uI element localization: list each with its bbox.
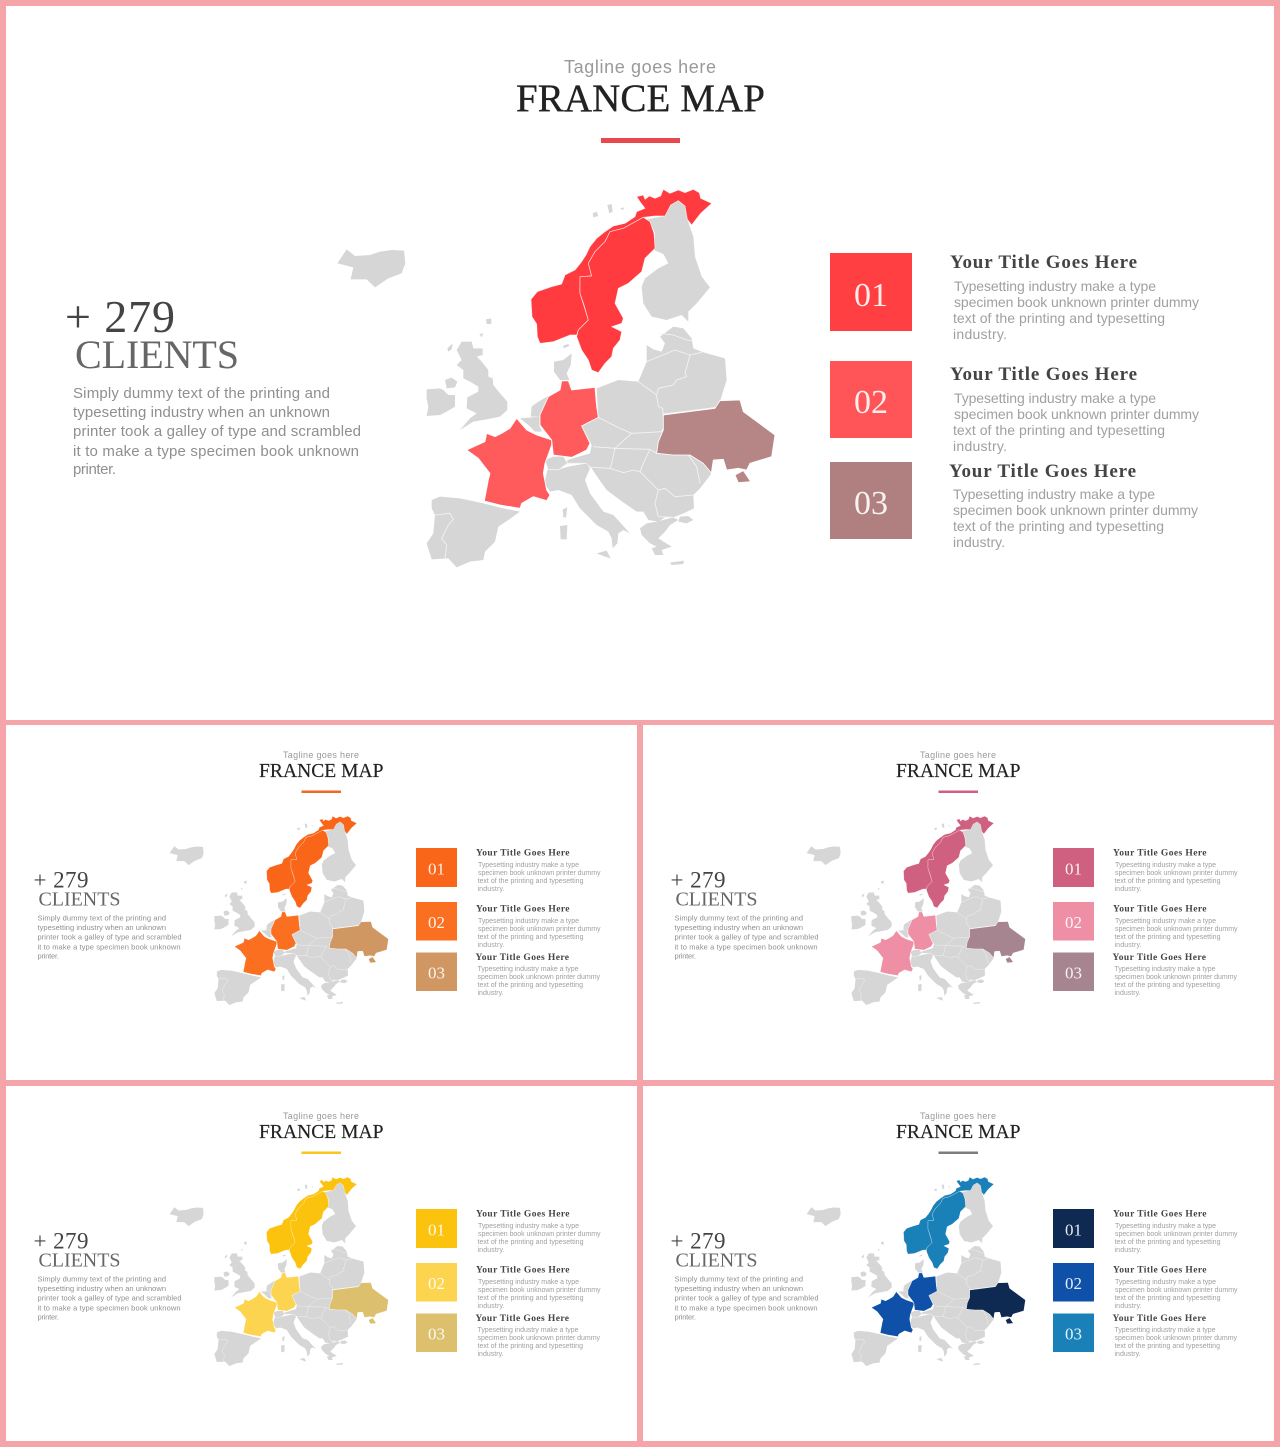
item 02 text: Your Title Goes Here	[950, 364, 1137, 385]
item 01 text: industry.	[1114, 886, 1142, 893]
item 01 box: 01	[1065, 860, 1082, 878]
item 03 text: specimen book unknown printer dummy	[478, 974, 600, 981]
item 02 text: text of the printing and typesetting	[953, 422, 1165, 438]
item 03 text	[476, 953, 600, 997]
left description: typesetting industry when an unknown	[674, 923, 803, 932]
item 01 box	[1053, 848, 1094, 887]
item 01 text: specimen book unknown printer dummy	[478, 870, 601, 877]
left description: printer took a galley of type and scrambled	[674, 932, 818, 942]
title underline	[302, 790, 341, 793]
item 02 text: specimen book unknown printer dummy	[954, 406, 1199, 422]
item 02 text: text of the printing and typesetting	[1114, 934, 1221, 941]
item 01 box	[416, 1209, 457, 1248]
item 02 box: 02	[428, 913, 445, 932]
stat: clients label: CLIENTS	[676, 888, 758, 910]
item 03 box	[416, 952, 457, 991]
left description: it to make a type specimen book unknown	[73, 443, 359, 460]
item 03 text	[476, 1314, 600, 1358]
item 01 text: text of the printing and typesetting	[478, 878, 584, 885]
item 03 text: text of the printing and typesetting	[478, 1343, 583, 1350]
item 02 text: specimen book unknown printer dummy	[1115, 1287, 1238, 1294]
item 03 text: Your Title Goes Here	[949, 461, 1136, 482]
item 03 text: Typesetting industry make a type	[1114, 1327, 1216, 1334]
item 02 text	[476, 1266, 601, 1310]
item 02 text: Your Title Goes Here	[1113, 1266, 1206, 1276]
item 01 text: text of the printing and typesetting	[478, 1239, 584, 1246]
item 02 box: 02	[428, 1274, 445, 1293]
item 02 text	[476, 904, 601, 949]
item 01 text	[950, 252, 1199, 342]
item 03 text: Typesetting industry make a type	[953, 486, 1155, 502]
item 02 text: Typesetting industry make a type	[1115, 918, 1216, 925]
item 01 text: Typesetting industry make a type	[1115, 1223, 1216, 1230]
item 02 text: Typesetting industry make a type	[478, 918, 579, 925]
item 03 box	[416, 1314, 457, 1352]
tagline: Tagline goes here	[283, 750, 359, 760]
tagline: Tagline goes here	[920, 750, 996, 760]
stat: clients label: CLIENTS	[38, 1250, 120, 1272]
item 03 box	[1053, 1314, 1094, 1352]
item 02 text: Typesetting industry make a type	[954, 390, 1156, 406]
left description: Simply dummy text of the printing and	[73, 385, 330, 402]
item 01 text: Your Title Goes Here	[950, 252, 1137, 273]
item 02 box	[416, 902, 457, 940]
title underline	[302, 1152, 341, 1154]
item 03 text: text of the printing and typesetting	[1114, 982, 1220, 989]
item 01 text: Typesetting industry make a type	[478, 862, 579, 869]
left description: it to make a type specimen book unknown	[38, 942, 180, 952]
item 03 text: Your Title Goes Here	[476, 953, 569, 963]
title underline	[938, 1152, 978, 1154]
item 01 box: 01	[1065, 1220, 1082, 1240]
stat: clients number: + 279	[670, 868, 726, 892]
item 01 text: Typesetting industry make a type	[478, 1223, 579, 1230]
item 03 box	[1053, 952, 1094, 991]
item 02 text: text of the printing and typesetting	[478, 1295, 584, 1302]
item 03 box: 03	[854, 485, 888, 522]
left description: printer took a galley of type and scrambled	[38, 932, 182, 942]
item 02 text: industry.	[478, 1303, 505, 1310]
item 03 text: industry.	[478, 1351, 504, 1358]
left description: printer took a galley of type and scrambled	[73, 423, 361, 440]
item 02 text: industry.	[478, 942, 505, 949]
item 02 text: Your Title Goes Here	[476, 1266, 570, 1276]
item 02 text	[950, 364, 1199, 454]
stat: clients number: + 279	[65, 291, 175, 342]
panel: pink slide background	[643, 725, 1274, 1080]
item 01 text	[1113, 1210, 1238, 1254]
item 02 box: 02	[854, 384, 888, 421]
slide: pink	[670, 750, 1238, 1005]
item 01 text	[476, 848, 601, 893]
title: FRANCE MAP	[896, 761, 1021, 782]
item 01 box	[416, 848, 457, 887]
item 03 text: industry.	[478, 990, 504, 997]
item 03 text: Your Title Goes Here	[1112, 1314, 1206, 1324]
item 02 text: specimen book unknown printer dummy	[1115, 926, 1238, 933]
left description	[38, 914, 182, 960]
item 01 text: specimen book unknown printer dummy	[478, 1231, 601, 1238]
stat: clients label: CLIENTS	[38, 888, 120, 910]
item 02 text: Typesetting industry make a type	[478, 1279, 579, 1286]
item 02 box	[1053, 1263, 1094, 1302]
slide: orange	[34, 750, 601, 1005]
tagline: Tagline goes here	[920, 1111, 996, 1121]
panel: blue slide background	[643, 1086, 1274, 1441]
left description: it to make a type specimen book unknown	[674, 942, 818, 952]
item 03 box: 03	[1065, 964, 1082, 982]
item 03 text: specimen book unknown printer dummy	[1114, 974, 1238, 981]
map of Europe	[807, 816, 1025, 1005]
item 03 text: text of the printing and typesetting	[478, 982, 583, 989]
left description: typesetting industry when an unknown	[73, 404, 330, 421]
item 01 text: Your Title Goes Here	[1113, 1210, 1206, 1220]
item 03 text: Typesetting industry make a type	[478, 1327, 579, 1334]
left description: printer.	[38, 1312, 59, 1322]
item 02 text: specimen book unknown printer dummy	[478, 926, 601, 933]
left description: printer took a galley of type and scrambled	[38, 1294, 182, 1302]
stat: clients label: CLIENTS	[75, 332, 239, 377]
item 01 box	[1053, 1209, 1094, 1248]
item 02 box: 02	[1065, 913, 1082, 932]
item 01 text: Your Title Goes Here	[476, 848, 570, 858]
item 01 text: industry.	[1114, 1247, 1142, 1254]
item 01 box: 01	[428, 860, 445, 878]
item 02 text: industry.	[1114, 942, 1142, 949]
stat: clients number: + 279	[34, 1228, 88, 1254]
item 03 text: industry.	[1114, 990, 1141, 997]
item 03 text	[1112, 1314, 1238, 1358]
item 01 text	[476, 1210, 601, 1254]
item 03 text: specimen book unknown printer dummy	[953, 502, 1198, 518]
item 01 text: Typesetting industry make a type	[1115, 862, 1216, 869]
left description	[73, 385, 361, 478]
item 02 text: Typesetting industry make a type	[1115, 1279, 1216, 1286]
panel: yellow slide background	[6, 1086, 637, 1441]
panel: orange slide background	[6, 725, 637, 1080]
tagline: Tagline goes here	[564, 57, 716, 77]
item 01 box: 01	[428, 1220, 445, 1240]
item 02 text: Your Title Goes Here	[476, 904, 570, 914]
slide: blue	[670, 1111, 1238, 1366]
item 03 text: text of the printing and typesetting	[1114, 1343, 1220, 1350]
item 02 box	[830, 361, 912, 438]
item 01 text: industry.	[953, 326, 1007, 342]
left description: printer.	[674, 952, 696, 960]
left description: printer.	[73, 461, 116, 478]
left description: Simply dummy text of the printing and	[674, 1274, 803, 1284]
item 03 box: 03	[428, 1324, 445, 1344]
left description	[674, 914, 818, 960]
item 01 text: industry.	[478, 886, 505, 893]
item 02 text: industry.	[1114, 1303, 1142, 1310]
left description: it to make a type specimen book unknown	[674, 1304, 818, 1312]
item 03 text: specimen book unknown printer dummy	[478, 1335, 600, 1342]
stat: clients number: + 279	[670, 1228, 726, 1254]
item 02 box	[1053, 902, 1094, 940]
title: FRANCE MAP	[896, 1122, 1021, 1143]
left description	[674, 1274, 818, 1322]
item 01 text: Your Title Goes Here	[1113, 848, 1206, 858]
tagline: Tagline goes here	[283, 1111, 359, 1121]
item 02 text: text of the printing and typesetting	[478, 934, 584, 941]
item 03 box	[830, 462, 912, 539]
item 02 text	[1113, 904, 1238, 949]
item 02 text: text of the printing and typesetting	[1114, 1295, 1221, 1302]
title: FRANCE MAP	[516, 77, 765, 120]
item 01 text: text of the printing and typesetting	[1114, 1239, 1221, 1246]
item 03 text: industry.	[953, 534, 1005, 550]
map of Europe	[170, 1177, 388, 1366]
item 01 box: 01	[854, 277, 888, 314]
left description: Simply dummy text of the printing and	[674, 914, 803, 922]
item 01 text	[1113, 848, 1238, 893]
map of Europe	[807, 1177, 1025, 1366]
item 03 text: Your Title Goes Here	[476, 1314, 569, 1324]
item 01 text: specimen book unknown printer dummy	[1115, 870, 1238, 877]
item 03 box: 03	[428, 964, 445, 982]
item 02 text: industry.	[953, 438, 1007, 454]
left description: typesetting industry when an unknown	[38, 923, 166, 932]
left description: Simply dummy text of the printing and	[38, 1274, 166, 1284]
title underline	[601, 138, 680, 143]
item 01 text: industry.	[478, 1247, 505, 1254]
item 02 text: Your Title Goes Here	[1113, 904, 1206, 914]
title underline	[938, 790, 978, 793]
left description	[38, 1274, 182, 1322]
item 01 text: Typesetting industry make a type	[954, 278, 1156, 294]
item 03 text: specimen book unknown printer dummy	[1114, 1335, 1238, 1342]
left description: typesetting industry when an unknown	[674, 1284, 803, 1293]
slide: large red	[65, 57, 1199, 567]
left description: it to make a type specimen book unknown	[38, 1304, 180, 1312]
left description: typesetting industry when an unknown	[38, 1284, 166, 1293]
stat: clients number: + 279	[34, 868, 88, 892]
item 01 text: text of the printing and typesetting	[953, 310, 1165, 326]
item 02 box	[416, 1263, 457, 1302]
item 01 box	[830, 253, 912, 331]
left description: printer.	[38, 952, 59, 960]
left description: printer took a galley of type and scrambled	[674, 1294, 818, 1302]
item 01 text: text of the printing and typesetting	[1114, 878, 1221, 885]
item 03 text: Typesetting industry make a type	[478, 966, 579, 973]
item 01 text: Your Title Goes Here	[476, 1210, 570, 1220]
item 03 text	[949, 461, 1198, 550]
item 03 text: industry.	[1114, 1351, 1141, 1358]
item 03 text: Your Title Goes Here	[1112, 953, 1206, 963]
item 01 text: specimen book unknown printer dummy	[954, 294, 1199, 310]
item 03 text	[1112, 953, 1238, 997]
left description: Simply dummy text of the printing and	[38, 914, 166, 922]
item 02 box: 02	[1065, 1274, 1082, 1293]
title: FRANCE MAP	[259, 761, 384, 782]
item 02 text	[1113, 1266, 1238, 1310]
stat: clients label: CLIENTS	[676, 1250, 758, 1272]
panel: large slide background	[6, 6, 1274, 720]
map of Europe	[170, 816, 388, 1005]
title: FRANCE MAP	[259, 1122, 384, 1143]
item 03 text: text of the printing and typesetting	[953, 518, 1164, 534]
item 01 text: specimen book unknown printer dummy	[1115, 1231, 1238, 1238]
item 02 text: specimen book unknown printer dummy	[478, 1287, 601, 1294]
item 03 text: Typesetting industry make a type	[1114, 966, 1216, 973]
left description: printer.	[674, 1312, 696, 1322]
item 03 box: 03	[1065, 1324, 1082, 1344]
map of Europe	[337, 189, 775, 567]
slide: yellow	[34, 1111, 601, 1366]
